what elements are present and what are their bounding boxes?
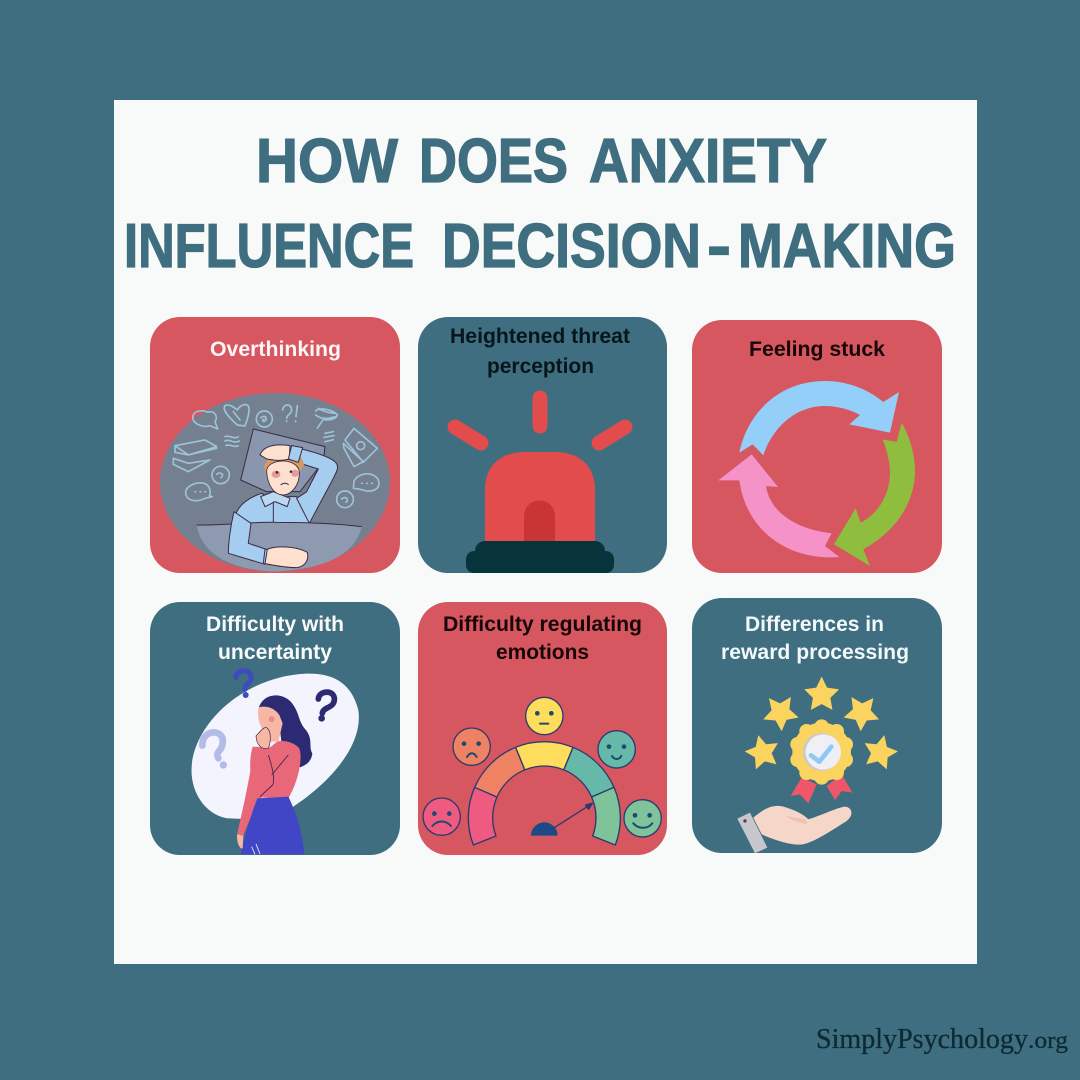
illustration: man lying awake — [160, 393, 390, 572]
title — [124, 127, 956, 281]
icon: red siren — [455, 398, 625, 573]
illustration: thinking woman — [192, 671, 359, 854]
chart: emotion gauge — [423, 697, 661, 845]
title: INFLUENCE — [124, 212, 414, 281]
panel: white content panel — [114, 100, 977, 964]
title: - — [707, 212, 731, 281]
panel: differences in reward processing — [692, 598, 942, 853]
panel: overthinking — [150, 317, 400, 573]
panel: differences in reward processing: Differences in — [745, 613, 884, 636]
panel: difficulty regulating emotions — [418, 602, 667, 855]
icon: medal, stars and open hand — [737, 677, 901, 853]
icon: cycle arrows — [718, 381, 915, 566]
panel: feeling stuck: Feeling stuck — [749, 338, 885, 361]
panel: differences in reward processing: reward processing — [721, 641, 909, 664]
panel: difficulty regulating emotions: Difficulty regulating — [443, 613, 642, 636]
panel: heightened threat perception — [418, 317, 667, 573]
panel: heightened threat perception: Heightened threat — [450, 325, 630, 348]
title: MAKING — [738, 212, 956, 281]
panel: difficulty with uncertainty: Difficulty with — [206, 613, 344, 636]
panel: difficulty with uncertainty — [150, 602, 400, 855]
panel: feeling stuck — [692, 320, 942, 573]
footer: source credit: .org — [1028, 1028, 1068, 1054]
title: DECISION — [442, 212, 701, 281]
title: ANXIETY — [589, 127, 827, 196]
panel: overthinking: Overthinking — [210, 338, 341, 361]
title: HOW — [256, 127, 398, 196]
panel: difficulty regulating emotions: emotions — [496, 641, 589, 664]
footer: source credit: SimplyPsychology — [816, 1023, 1028, 1055]
panel: difficulty with uncertainty: uncertainty — [218, 641, 332, 664]
panel: heightened threat perception: perception — [487, 355, 594, 378]
title: DOES — [419, 127, 568, 196]
